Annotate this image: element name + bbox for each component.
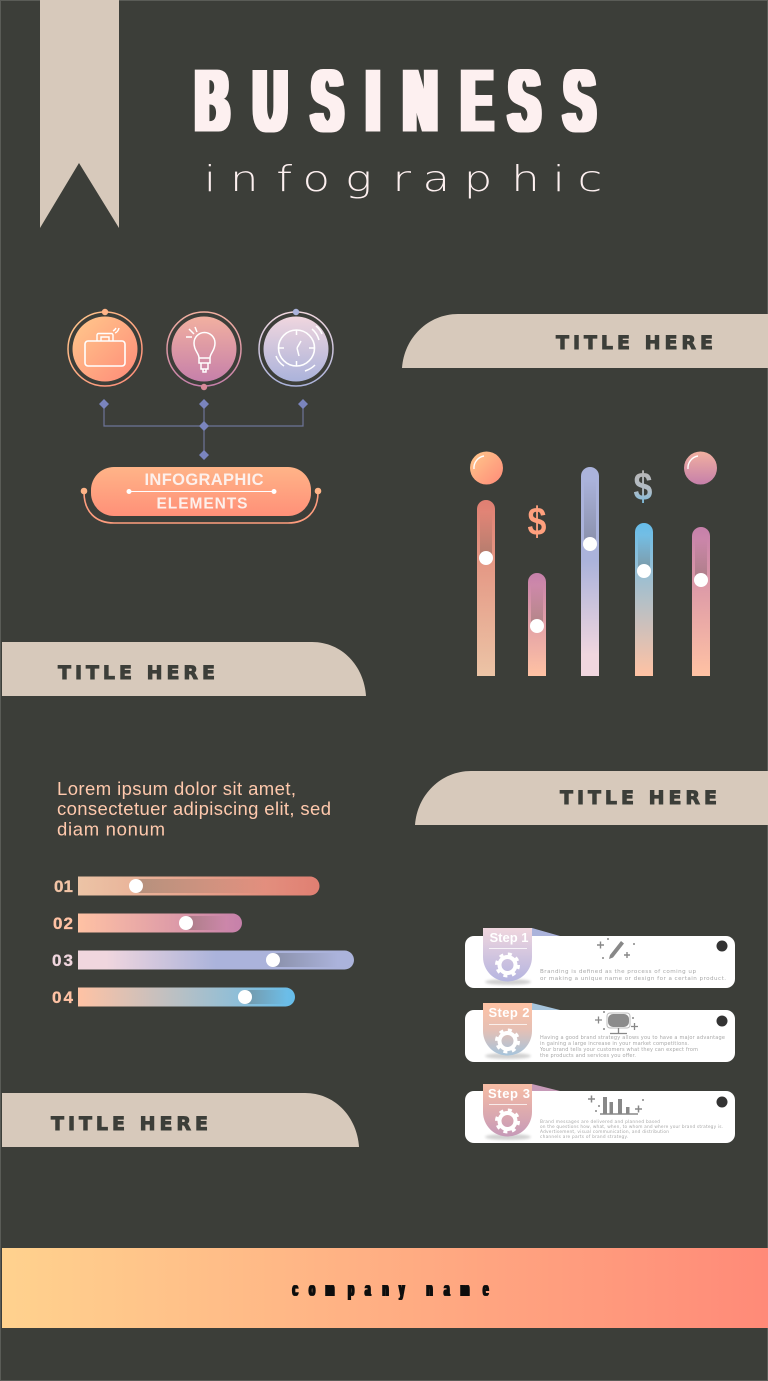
step 2: Having a good brand strategy allows you to have a major advantage [540, 1035, 725, 1041]
bar 5 [692, 527, 710, 676]
row 01 [54, 876, 320, 896]
text block: lorem ipsum: consectetuer adipiscing elit, sed [57, 798, 331, 819]
step 2 [465, 1003, 735, 1062]
bar 1 [477, 500, 495, 676]
row 02 [53, 914, 242, 933]
step 1: or making a unique name or design for a certain product. [540, 976, 726, 982]
icon: clock [259, 309, 333, 386]
title tab: left middle [2, 642, 366, 696]
panel: icon tree [68, 309, 333, 523]
icon: briefcase [68, 309, 142, 386]
title tab: right middle: TITLE HERE [560, 787, 717, 809]
text block: lorem ipsum: diam nonum [57, 818, 165, 840]
bar chart: vertical [470, 452, 717, 676]
connector lines [99, 399, 308, 460]
step 3: channels are parts of brand strategy. [540, 1134, 628, 1140]
title: BUSINESS [196, 52, 595, 150]
step 3: on the questions how, what, when, to whom and where your brand strategy is. [540, 1124, 723, 1130]
step 2: the products and services you offer. [540, 1053, 636, 1059]
step 3: Advertisement, visual communication, and distribution [540, 1129, 669, 1135]
icon: light bulb [167, 312, 241, 390]
row 01: 01 [54, 877, 73, 896]
ribbon bookmark [40, 0, 119, 228]
pill: infographic elements: INFOGRAPHIC [144, 471, 264, 489]
text block: lorem ipsum [57, 778, 331, 840]
pill: infographic elements [91, 467, 311, 516]
bar 3 [581, 467, 599, 676]
text block: lorem ipsum: Lorem ipsum dolor sit amet, [57, 778, 296, 799]
row 02: 02 [53, 914, 73, 933]
step 2: Your brand tells your customers what they can expect from [539, 1047, 698, 1053]
row 04: 04 [52, 988, 74, 1007]
step 3: Brand messages are delivered and planned based [540, 1119, 660, 1125]
arc under pill [81, 488, 321, 523]
row 03: 03 [52, 951, 73, 970]
footer band: company name [292, 1280, 489, 1301]
bar 2 [528, 573, 546, 676]
step 1: Step 1 [490, 930, 528, 945]
title: infographic [204, 157, 602, 200]
title tab: left bottom: TITLE HERE [51, 1113, 208, 1135]
title tab: top right: TITLE HERE [556, 332, 713, 354]
bar chart: horizontal [52, 876, 354, 1007]
icon: dollar blue: $ [634, 463, 653, 509]
panel: step cards [465, 928, 735, 1143]
icon: dollar orange: $ [528, 498, 547, 544]
title [196, 52, 602, 200]
row 03 [52, 950, 354, 970]
row 04 [52, 988, 295, 1007]
title tab: left bottom [2, 1093, 359, 1147]
icon: orange ball [470, 452, 503, 484]
icon: pink ball [684, 452, 717, 484]
pill: infographic elements: ELEMENTS [156, 496, 248, 512]
title tab: top right [402, 314, 768, 368]
step 1: Branding is defined as the process of coming up [540, 969, 696, 975]
step 3 [465, 1084, 735, 1143]
step 2: Step 2 [488, 1005, 530, 1020]
title tab: left middle: TITLE HERE [58, 662, 215, 684]
bar 4 [635, 523, 653, 676]
footer band [2, 1248, 768, 1328]
step 3: Step 3 [488, 1086, 530, 1101]
title tab: right middle [415, 771, 768, 825]
step 1 [465, 928, 735, 988]
step 2: in gaining a large increase in your market competitions. [540, 1041, 689, 1047]
